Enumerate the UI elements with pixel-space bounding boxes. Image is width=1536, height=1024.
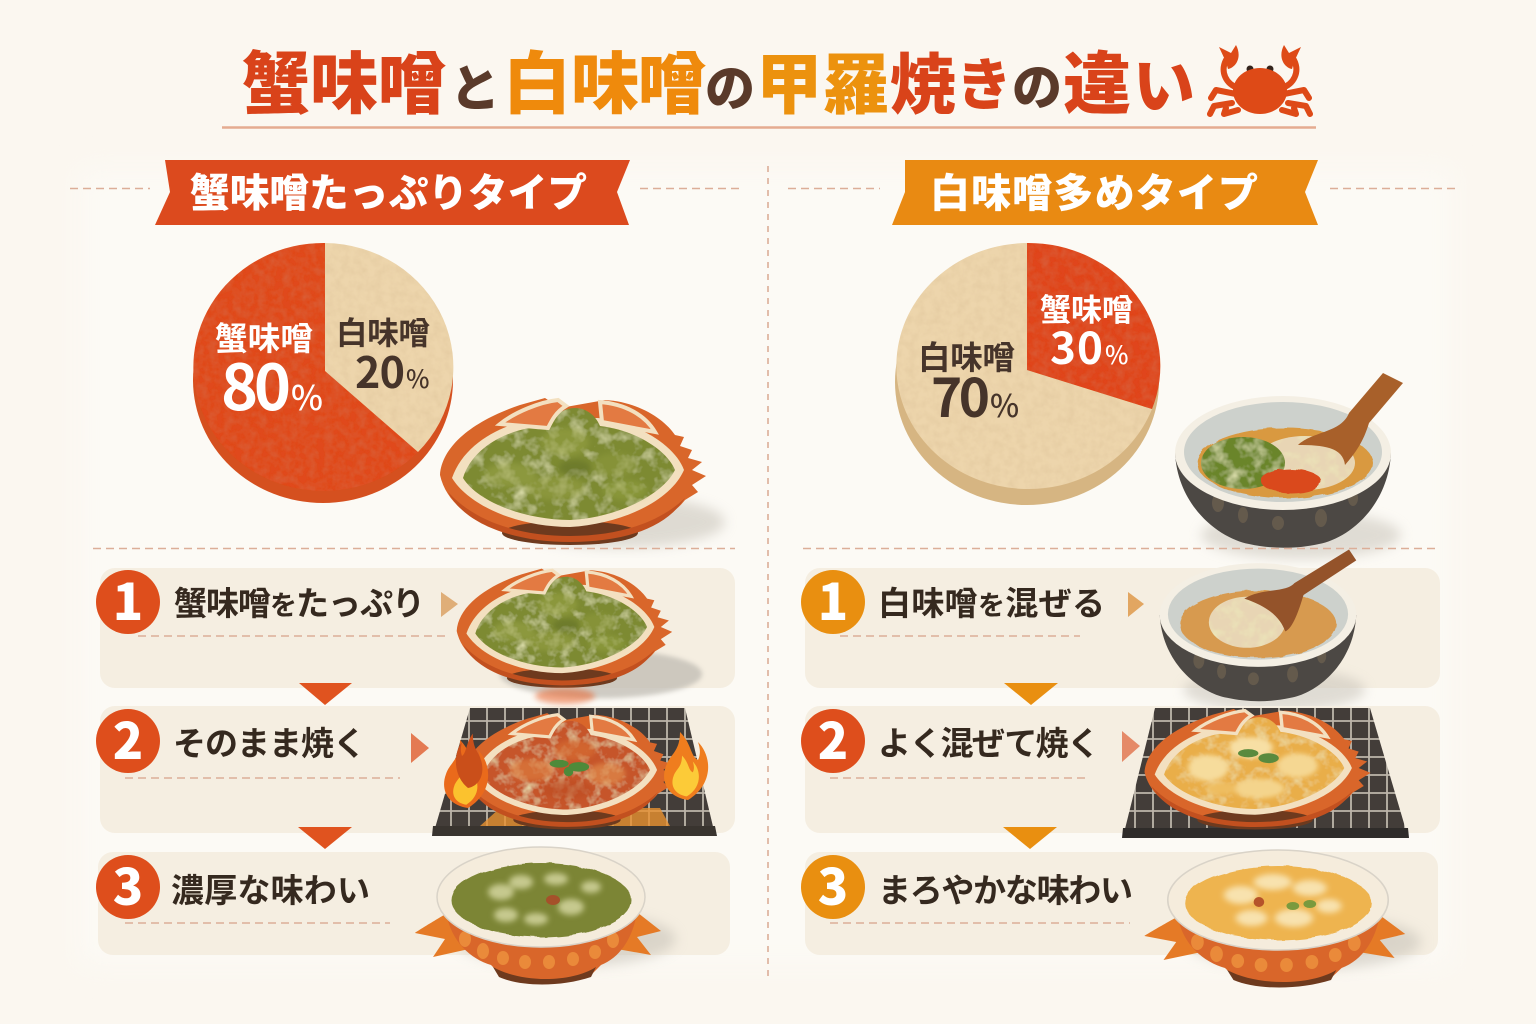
label: 白味噌 20%: 20 — [355, 339, 405, 401]
step 3 — [801, 848, 1438, 988]
number badge 3: 3 — [113, 848, 143, 920]
title: 甲羅 — [756, 32, 889, 128]
arrow — [1128, 592, 1144, 617]
label: 蟹味噌 30% — [1040, 285, 1133, 377]
banner: left — [70, 160, 742, 225]
step 1 — [801, 549, 1440, 711]
label: 白味噌 70%: 白味噌 — [918, 332, 1015, 379]
number badge 2 — [96, 702, 160, 774]
arrow — [411, 733, 429, 763]
title: 白味噌 — [503, 29, 706, 128]
banner: right — [788, 160, 1460, 225]
label: 蟹味噌 80% — [215, 313, 323, 429]
arrow down — [299, 683, 352, 705]
title: 蟹味噌 — [242, 29, 446, 128]
label: 蟹味噌 80%: 蟹味噌 — [215, 313, 313, 360]
number badge 2: 2 — [113, 702, 143, 774]
step 3 — [96, 847, 730, 984]
label: よく混ぜて焼く — [878, 717, 1100, 765]
step 2 — [801, 702, 1440, 838]
arrow — [441, 592, 458, 617]
label: 白味噌を混ぜる — [878, 577, 1105, 625]
label: 蟹味噌 80%: % — [291, 371, 323, 420]
number badge 3: 3 — [818, 848, 848, 920]
illustration: bowl mixing — [1160, 549, 1365, 711]
icon: crab — [1210, 45, 1310, 114]
label: 蟹味噌 30%: % — [1105, 336, 1128, 372]
number badge 1: 1 — [818, 563, 848, 635]
step 1 — [96, 563, 735, 698]
arrow down — [1003, 827, 1057, 849]
title: と — [450, 49, 500, 121]
banner: left: 蟹味噌たっぷりタイプ — [190, 162, 587, 219]
pie chart: 80/20 — [193, 243, 453, 503]
label: 白味噌 70%: % — [990, 381, 1019, 426]
label: 蟹味噌をたっぷり — [174, 577, 425, 625]
panel: left column 蟹味噌たっぷりタイプ — [70, 160, 742, 984]
label: 白味噌 70%: 70 — [931, 357, 990, 433]
panel: right column 白味噌多めタイプ — [788, 160, 1460, 988]
label: 濃厚な味わい — [171, 864, 370, 912]
number badge 3 — [801, 848, 865, 920]
number badge 2 — [801, 702, 865, 774]
illustration: bowl with mixed miso — [1175, 373, 1403, 559]
number badge 1: 1 — [113, 563, 143, 635]
title: の — [1012, 48, 1062, 120]
number badge 1 — [96, 563, 160, 635]
label: そのまま焼く — [173, 717, 366, 765]
arrow down — [298, 827, 352, 849]
title: 違 — [1063, 29, 1131, 128]
title — [222, 29, 1316, 128]
illustration: grill with white miso — [1122, 708, 1409, 838]
illustration: crab shell with kani miso — [440, 398, 725, 548]
label: 白味噌 20%: % — [406, 360, 429, 396]
illustration — [457, 569, 702, 698]
label: 白味噌 20%: 白味噌 — [336, 308, 430, 354]
illustration: finished kani miso — [415, 847, 676, 984]
title: の — [705, 49, 755, 121]
title: 焼 — [890, 32, 956, 128]
pie chart: 30/70 — [895, 243, 1160, 505]
illustration: grill with flames — [432, 688, 717, 836]
banner: right: 白味噌多めタイプ — [930, 161, 1258, 219]
label: 蟹味噌 30%: 蟹味噌 — [1040, 285, 1133, 330]
label: 白味噌 70% — [918, 332, 1019, 433]
label: 蟹味噌 30%: 30 — [1050, 313, 1103, 377]
label: 白味噌 20% — [336, 308, 430, 401]
label: まろやかな味わい — [878, 864, 1133, 912]
center divider — [767, 166, 769, 976]
number badge 1 — [801, 563, 865, 635]
step 2 — [96, 688, 735, 836]
title: き — [956, 41, 1012, 122]
label: 蟹味噌 80%: 80 — [221, 338, 291, 429]
illustration: finished white miso — [1144, 850, 1421, 988]
title: い — [1133, 36, 1195, 126]
arrow — [1122, 731, 1140, 762]
arrow down — [1004, 683, 1058, 705]
number badge 3 — [96, 848, 160, 920]
number badge 2: 2 — [818, 702, 848, 774]
